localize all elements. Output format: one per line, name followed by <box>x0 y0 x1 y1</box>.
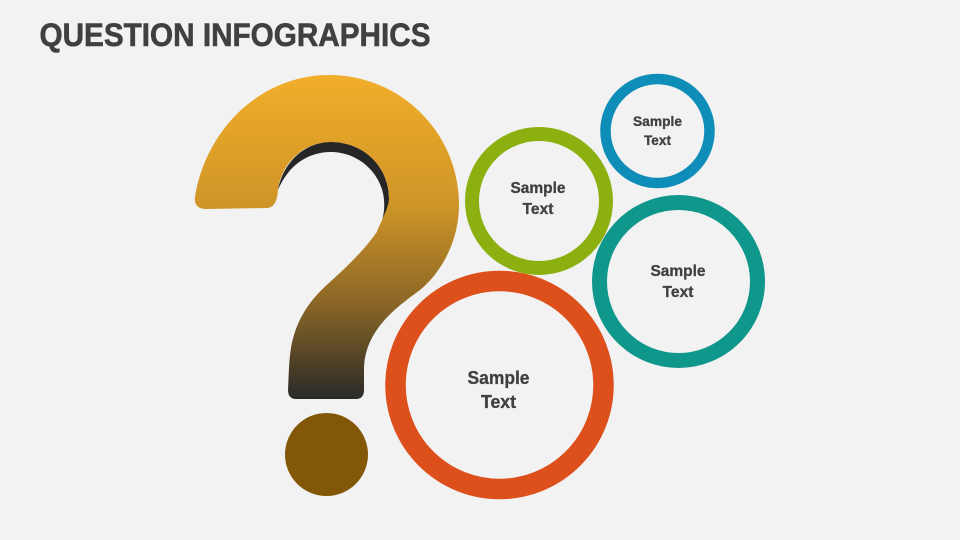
circle: red: Sample <box>468 368 530 388</box>
circle: blue: Text <box>644 132 671 148</box>
circle: red: Text <box>481 392 516 412</box>
circle: teal: Text <box>662 284 694 301</box>
circle: teal: Sample <box>650 263 706 280</box>
circle: blue <box>606 79 710 183</box>
question mark dot <box>285 413 368 496</box>
circle: green: Sample <box>510 180 566 197</box>
circle: teal <box>600 202 758 360</box>
circle: blue: Sample <box>633 113 682 129</box>
icon: question mark <box>195 75 459 496</box>
question mark inner shadow <box>278 142 389 230</box>
circle: green <box>472 134 606 268</box>
circle: red <box>396 281 604 489</box>
circle: green: Text <box>522 201 554 218</box>
question mark hook and stem <box>195 75 459 399</box>
title: QUESTION INFOGRAPHICS <box>40 17 430 53</box>
